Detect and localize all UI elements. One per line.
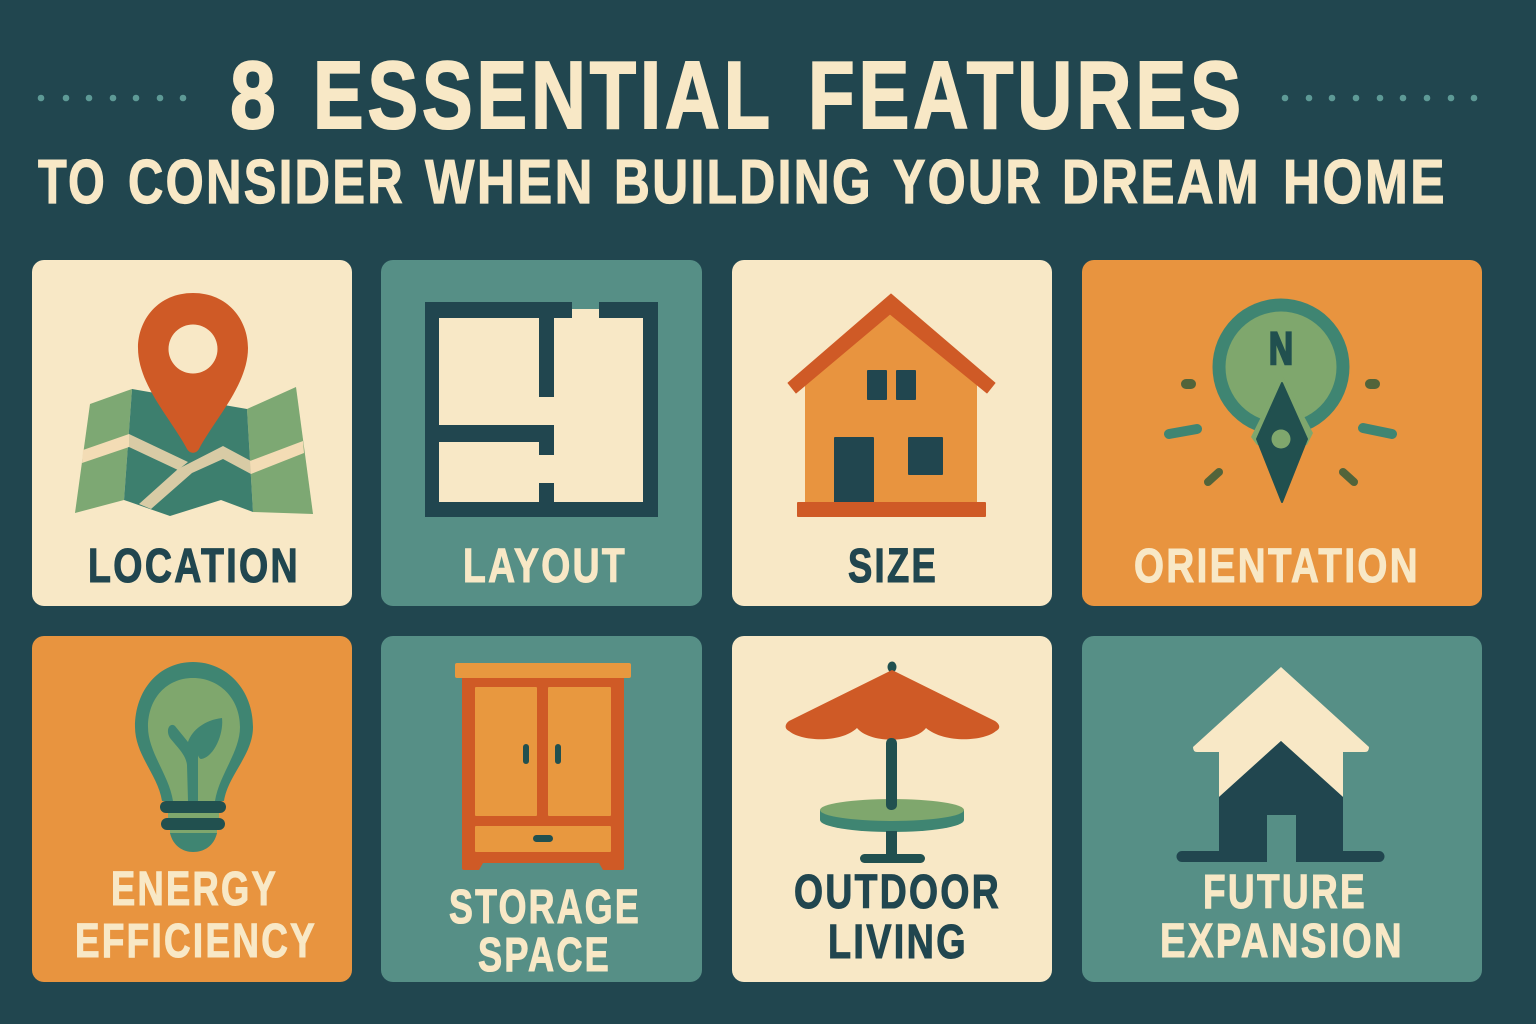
title: CONSIDER bbox=[128, 148, 405, 217]
icon: light bulb bbox=[135, 662, 253, 852]
icon: house with expansion roof bbox=[1177, 667, 1384, 862]
label: SPACE bbox=[478, 929, 611, 982]
label: LAYOUT bbox=[463, 540, 627, 593]
dotted ornament right bbox=[1282, 95, 1477, 101]
title bbox=[38, 42, 1447, 217]
label bbox=[75, 863, 317, 968]
label: LOCATION bbox=[88, 540, 300, 593]
icon: map with pin bbox=[75, 293, 313, 516]
panel: future expansion bbox=[1082, 636, 1482, 982]
label: EXPANSION bbox=[1160, 915, 1404, 968]
label bbox=[1160, 866, 1404, 968]
icon: floor plan bbox=[425, 302, 658, 517]
panel: orientation bbox=[1082, 260, 1482, 606]
title: DREAM bbox=[1062, 148, 1261, 217]
title: FEATURES bbox=[808, 42, 1245, 149]
panel: location bbox=[32, 260, 352, 606]
title: 8 bbox=[230, 42, 280, 149]
panel: energy efficiency bbox=[32, 636, 352, 982]
dotted ornament left bbox=[38, 95, 186, 101]
icon: house bbox=[788, 294, 995, 517]
label bbox=[794, 866, 1001, 969]
panel: outdoor living bbox=[732, 636, 1052, 982]
panel: size bbox=[732, 260, 1052, 606]
title: BUILDING bbox=[614, 148, 873, 217]
label: FUTURE bbox=[1203, 866, 1367, 919]
title: TO bbox=[38, 148, 107, 217]
label: ORIENTATION bbox=[1134, 540, 1420, 593]
label: SIZE bbox=[848, 540, 938, 593]
label: OUTDOOR bbox=[794, 866, 1001, 919]
panel: storage space bbox=[381, 636, 702, 982]
icon: wardrobe bbox=[455, 663, 631, 870]
label: LIVING bbox=[828, 916, 968, 969]
panel: layout bbox=[381, 260, 702, 606]
title: YOUR bbox=[893, 148, 1043, 217]
label: STORAGE bbox=[449, 881, 641, 934]
label bbox=[449, 881, 641, 982]
icon: compass: N bbox=[1269, 323, 1293, 374]
title: WHEN bbox=[425, 148, 595, 217]
icon: compass bbox=[1169, 298, 1392, 502]
label: ENERGY bbox=[111, 863, 278, 916]
icon: patio umbrella and table bbox=[786, 662, 999, 863]
title: ESSENTIAL bbox=[313, 42, 774, 149]
label: EFFICIENCY bbox=[75, 915, 317, 968]
title: HOME bbox=[1283, 148, 1447, 217]
